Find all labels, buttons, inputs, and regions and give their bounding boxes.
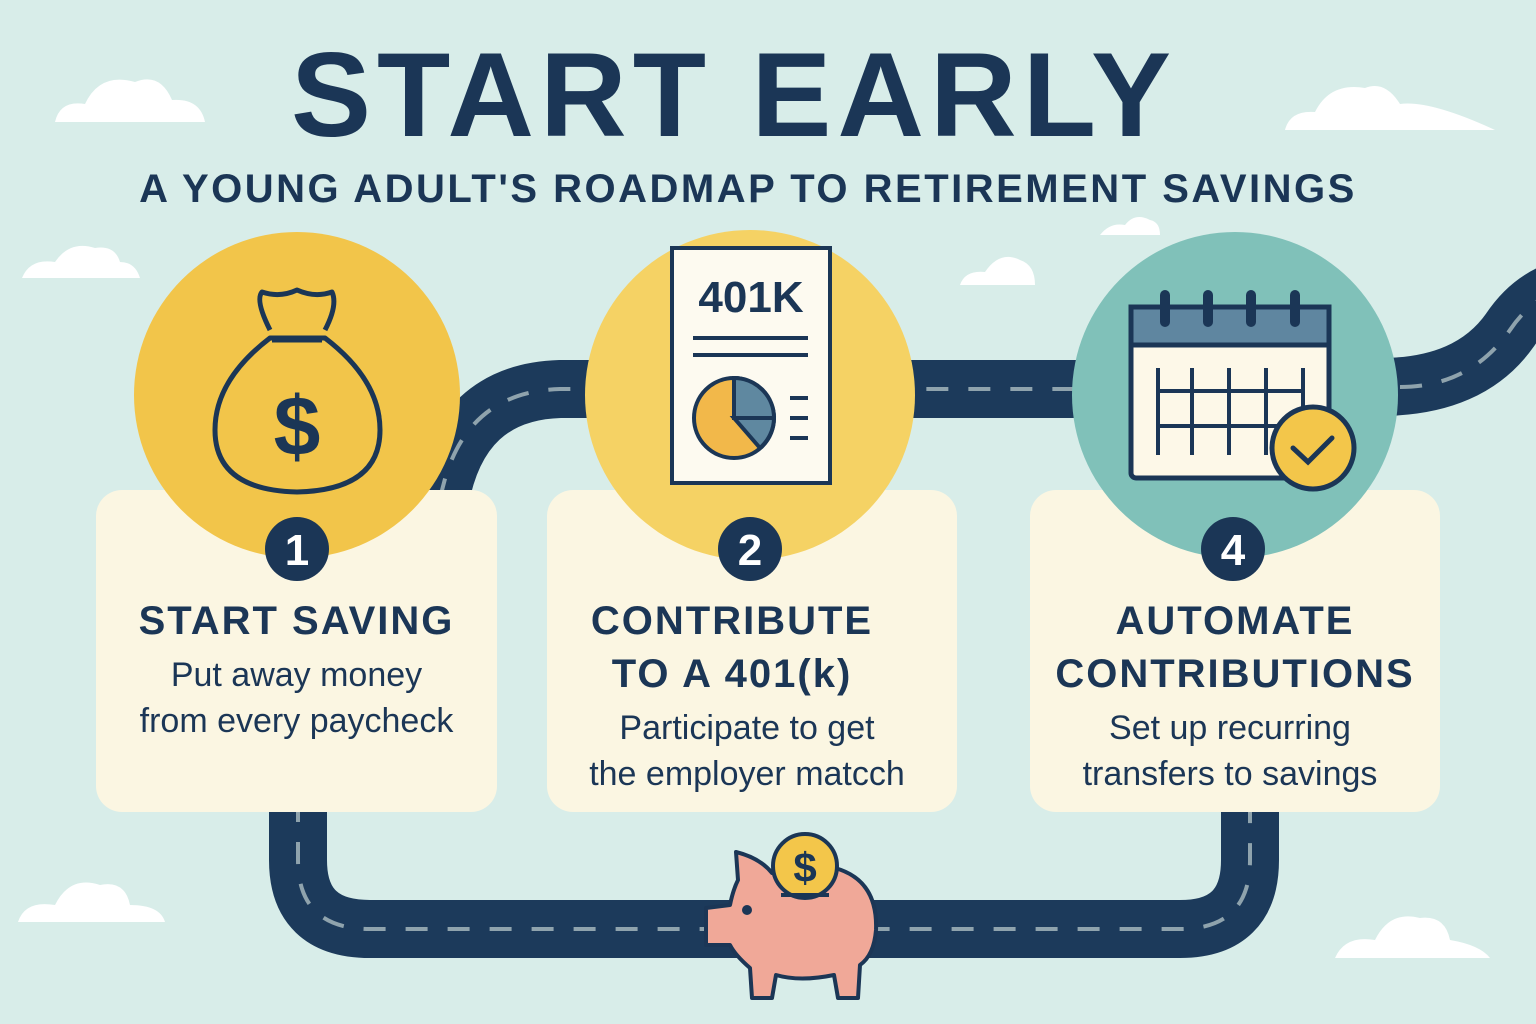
piggy bank [706, 834, 876, 998]
heading 2: TO A 401(k) [612, 652, 852, 696]
heading 3 [1055, 599, 1415, 696]
badge 4: 4 [1221, 526, 1246, 575]
text 1: from every paycheck [140, 702, 453, 740]
badge 1 [265, 517, 329, 581]
text 2: the employer matcch [589, 755, 905, 793]
panel 1 box [96, 490, 497, 812]
heading 1: START SAVING [139, 599, 454, 643]
title: START EARLY [291, 28, 1177, 162]
text 1 [140, 656, 454, 740]
badge 1: 1 [285, 526, 309, 575]
heading 3: CONTRIBUTIONS [1055, 652, 1415, 696]
text 3 [1083, 709, 1377, 793]
text 3: transfers to savings [1083, 755, 1377, 793]
text 3: Set up recurring [1109, 709, 1351, 747]
heading 3: AUTOMATE [1116, 599, 1354, 643]
heading 2 [591, 599, 873, 696]
circle 2: 401k document [585, 230, 915, 560]
circle 2: 401k document: 401K [698, 273, 804, 322]
badge 4 [1201, 517, 1265, 581]
badge 2: 2 [738, 526, 762, 575]
road [298, 290, 1536, 929]
circle 1: money bag [134, 232, 460, 558]
piggy bank: $ [793, 844, 817, 891]
text 2 [589, 709, 905, 793]
text 2: Participate to get [619, 709, 875, 747]
text 1: Put away money [171, 656, 422, 694]
badge 2 [718, 517, 782, 581]
subtitle: A YOUNG ADULT'S ROADMAP TO RETIREMENT SAVINGS [139, 167, 1357, 211]
panel 2 box [547, 490, 957, 812]
panel 3 box [1030, 490, 1440, 812]
heading 2: CONTRIBUTE [591, 599, 873, 643]
circle 1: money bag: $ [274, 379, 320, 473]
circle 3: calendar [1072, 232, 1398, 558]
